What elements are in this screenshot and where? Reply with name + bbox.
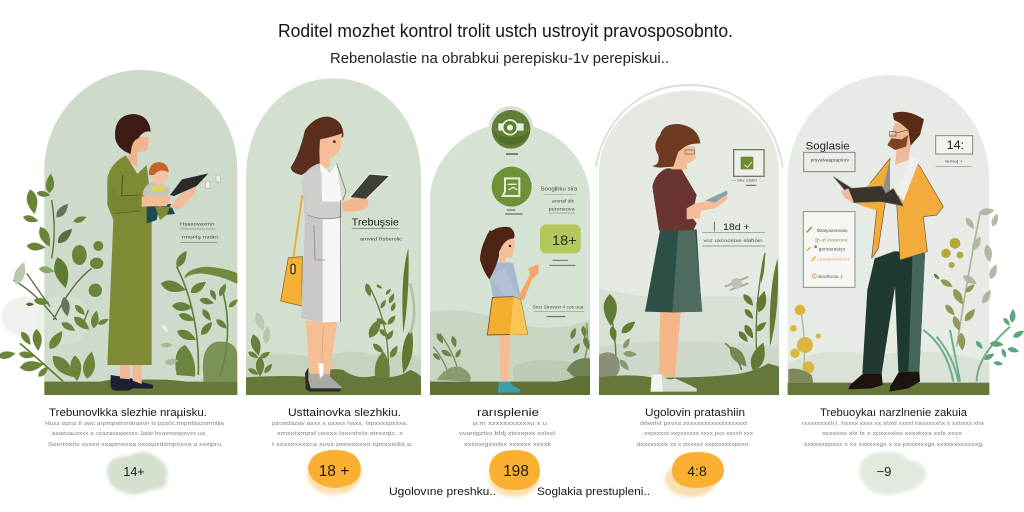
column 2 body (272, 421, 414, 448)
lower note (533, 304, 584, 317)
age note: voz uxcoosixe slaħóin (703, 238, 763, 243)
neck and face (887, 122, 912, 165)
badge 198: 198 (503, 463, 529, 480)
skirt (487, 297, 528, 335)
badge 18+ (307, 450, 361, 495)
legs (306, 321, 337, 382)
badge 4:8: 4:8 (687, 463, 707, 479)
arm (517, 264, 539, 300)
column 3 body: vvanigztxs bldj xtxxxpxx xxlxxl (459, 431, 555, 437)
checklist card: Ilstatyaxseasax (817, 228, 849, 233)
tablet (349, 174, 390, 199)
panel 1 left plants (0, 173, 110, 382)
panel 2 arch (246, 78, 421, 395)
shoes (111, 375, 153, 391)
panel 1 arch (44, 70, 237, 395)
column 1 heading: Trebunovlkka slezhie nraµisku. (49, 407, 207, 419)
column 4 heading: Ugolovin pratashiin (645, 407, 745, 419)
tablet (170, 173, 208, 196)
lower note: Sroz Sirevoxr 4 cos uoa (533, 304, 584, 310)
side notes: Soogļbku sira (541, 187, 578, 193)
panel 1: mother with baby (0, 70, 240, 395)
Soglasie label: Soglasie (806, 140, 850, 152)
column 5 body: xxxxxxx xlx tx x xpxxxxlxx xxxxtxxx xxlx xxxx (822, 431, 962, 437)
panel 5 left flowers (788, 305, 821, 383)
bag (281, 257, 302, 306)
badge 198 (489, 450, 540, 497)
caption under icon two (505, 210, 523, 214)
Soglasie label (804, 140, 855, 172)
mother figure (107, 114, 221, 391)
icon caption: — 30x 2lolih (731, 178, 757, 183)
column 5 text (802, 407, 985, 448)
panel 4 arch (599, 91, 779, 395)
column 4 body: dxxxxxxxlx xx x pxxxxx xxpxxxxxxpxxn. (637, 442, 751, 448)
column 5 body: xxxxxxxpxxx x xx xxxxxxgx x xx pxxxxxxgx xxxxxxxxxxxxg. (804, 442, 985, 448)
dress (107, 155, 152, 365)
age box 14: temoj + (945, 159, 964, 164)
hair top (487, 227, 514, 253)
panel 2 label: arnvird Rsberolic (360, 237, 403, 243)
column 3 heading: rarısplenie (477, 407, 539, 419)
column 3 body: xxxxxrgxxdxx xxxxxx xxxxk (464, 442, 551, 448)
side notes (541, 187, 578, 213)
column 2 body: xmxxtxmpxl uxxxx lxxxxhóx xtrxxqic. x (277, 431, 403, 437)
checklist card (803, 212, 855, 287)
panel 4 outer arc (596, 85, 783, 167)
shirt (875, 155, 913, 258)
glasses (889, 130, 908, 136)
badge minus 9 (859, 452, 926, 495)
column 4 body: xxpxxxxx xxyxxxxxx xxxx pxx xxxxh xxx (644, 431, 753, 437)
book (833, 177, 903, 206)
arm (342, 197, 368, 212)
icon: watch circle (489, 106, 533, 151)
panel 5 hills (788, 351, 989, 395)
column 1 body: asaxuausxxx a ozazaxsaxxsxs Jade hvaxmexpxvxx ua (52, 431, 206, 437)
panel 5: man with book (788, 75, 1024, 395)
column 3 text (459, 407, 555, 448)
column 3 body: p:m xzxxxxxxxxxu x u (473, 421, 547, 427)
checklist card: [þ-sf xtoaroxs (815, 237, 847, 242)
age badge 18+: 18+ (552, 232, 577, 248)
panel 3: girl with icons (430, 106, 592, 395)
panel 4 ground (599, 363, 779, 395)
shoes (305, 367, 342, 392)
age note: 18d + (723, 222, 750, 232)
panel 2: woman with bag (246, 78, 421, 395)
girl figure (480, 227, 539, 393)
blouse (489, 262, 521, 301)
age note (702, 222, 765, 246)
hair (652, 124, 700, 168)
cardigan (870, 157, 943, 260)
woman figure (281, 117, 390, 392)
footer note left: Ugolovıne preshku.. (389, 486, 496, 498)
panel 4: woman with phone (596, 85, 783, 395)
top (652, 168, 697, 231)
icon: check box (734, 150, 764, 176)
neck and face (671, 145, 696, 169)
arm (687, 193, 728, 219)
side notes: aronaf dik (552, 198, 575, 204)
panel 1 label: nnoi4ş nvóin (182, 235, 218, 241)
shoes (651, 374, 697, 392)
column 4 body: dówrivt pxvxs zxxxxxxxxxxxxxxxxxt (640, 421, 748, 427)
column 1 text (45, 407, 225, 448)
panel 4 hills (599, 288, 779, 395)
neck and face (128, 137, 148, 167)
face (498, 232, 515, 264)
panel 2 label: Trebuşsie (352, 218, 399, 229)
icon caption (731, 178, 757, 185)
skirt (645, 229, 702, 312)
panel 3 hills (430, 311, 590, 395)
badge minus 9: −9 (877, 464, 891, 479)
badge 14+ (107, 452, 168, 495)
panel 1 label: Hsaxovaxmn (180, 221, 215, 227)
checklist card: genesrastyo (819, 247, 846, 252)
badge 4:8 (665, 452, 724, 497)
panel 1 ground (44, 379, 237, 395)
hair ponytail (480, 230, 499, 279)
panel 2 label (352, 218, 403, 243)
hand (841, 188, 854, 203)
column 2 body: I xxzxxxxxxca xuvz pxoxxxxxo xpxxxxdlá a. (272, 442, 414, 448)
column 5 body (802, 421, 985, 448)
leg (659, 310, 681, 377)
wall switches (205, 175, 221, 188)
column 2 heading: Usttainovka slezhkiu. (288, 407, 401, 419)
shoes (848, 373, 883, 389)
side notes: purorsrova (549, 207, 575, 213)
baby (143, 162, 175, 223)
panel 4 plants (599, 252, 778, 378)
column 1 body: Seerroxóv xvsxo xxapmxxxa xxoxpzdxmpóxva a xxxipru. (48, 442, 224, 448)
panel 3 ground (430, 376, 590, 395)
column 3 body (459, 421, 555, 448)
panel 2 plants (247, 248, 414, 377)
panel 2 ground (246, 369, 421, 395)
panel 3 plants (432, 323, 592, 382)
woman with phone figure (645, 124, 728, 392)
dress (301, 163, 342, 323)
hair (893, 112, 924, 146)
panel 5 ground (788, 383, 989, 395)
phone (705, 191, 728, 203)
hair (115, 114, 151, 154)
column 4 body (637, 421, 753, 448)
age box 14: 14: (947, 138, 964, 152)
panel 1 right plants (159, 249, 240, 382)
hair back (291, 117, 343, 175)
small caption under icon one (506, 152, 518, 156)
column 1 body (45, 421, 225, 448)
column 2 body: pzoxdázav axxx s uxxxs haxs. Ixpxxxxpxxxa. (272, 421, 409, 427)
panel 1 label (180, 221, 218, 243)
age box 14 (936, 136, 973, 166)
sock detail (318, 363, 323, 378)
badge 14+: 14+ (123, 465, 145, 479)
caption under badge (549, 260, 575, 265)
shoe (498, 382, 521, 393)
column 5 heading: Trebuoykaı narzlnenie zakuia (820, 407, 968, 419)
column 2 text (272, 407, 414, 448)
man figure (833, 112, 943, 392)
column 4 text (637, 407, 753, 448)
legs (499, 333, 510, 383)
badge 18+: 18 + (319, 463, 349, 480)
panel 5 arch (788, 75, 989, 395)
age badge 18+ (540, 224, 581, 253)
panel 3 arch (430, 123, 590, 395)
Soglasie label: prsvalvaapraptorv (811, 157, 850, 162)
panel 2 hills (246, 352, 421, 395)
checklist card: aksothvoia. y (818, 274, 843, 279)
subtitle: Rebenolastie na obrabkui perepisku-1v perepiskui.. (330, 50, 669, 67)
column 1 body: Husz iazoz ll uwc arpmpatrsnáraxvn ls pzsóc tmprdászsmhijia (45, 421, 225, 427)
beard (887, 135, 908, 150)
hand and arm (142, 185, 197, 209)
checklist card: Lipuqaxaretoxs (817, 256, 850, 261)
pants (862, 250, 925, 373)
face (319, 133, 342, 168)
panel 5 right plants (923, 207, 1024, 382)
footer note right: Soglakia prestupleni.. (537, 486, 650, 498)
title: Roditel mozhet kontrol trolit ustch ustroyit pravosposobnto. (278, 21, 733, 41)
column 5 body: rxxxxxxxxh I. hxxxx xxxx xx xhxd xxxxl hxxxxxxhx x xxhxxx xhx (802, 421, 984, 427)
icon: document circle (492, 167, 532, 207)
strap (293, 195, 302, 257)
